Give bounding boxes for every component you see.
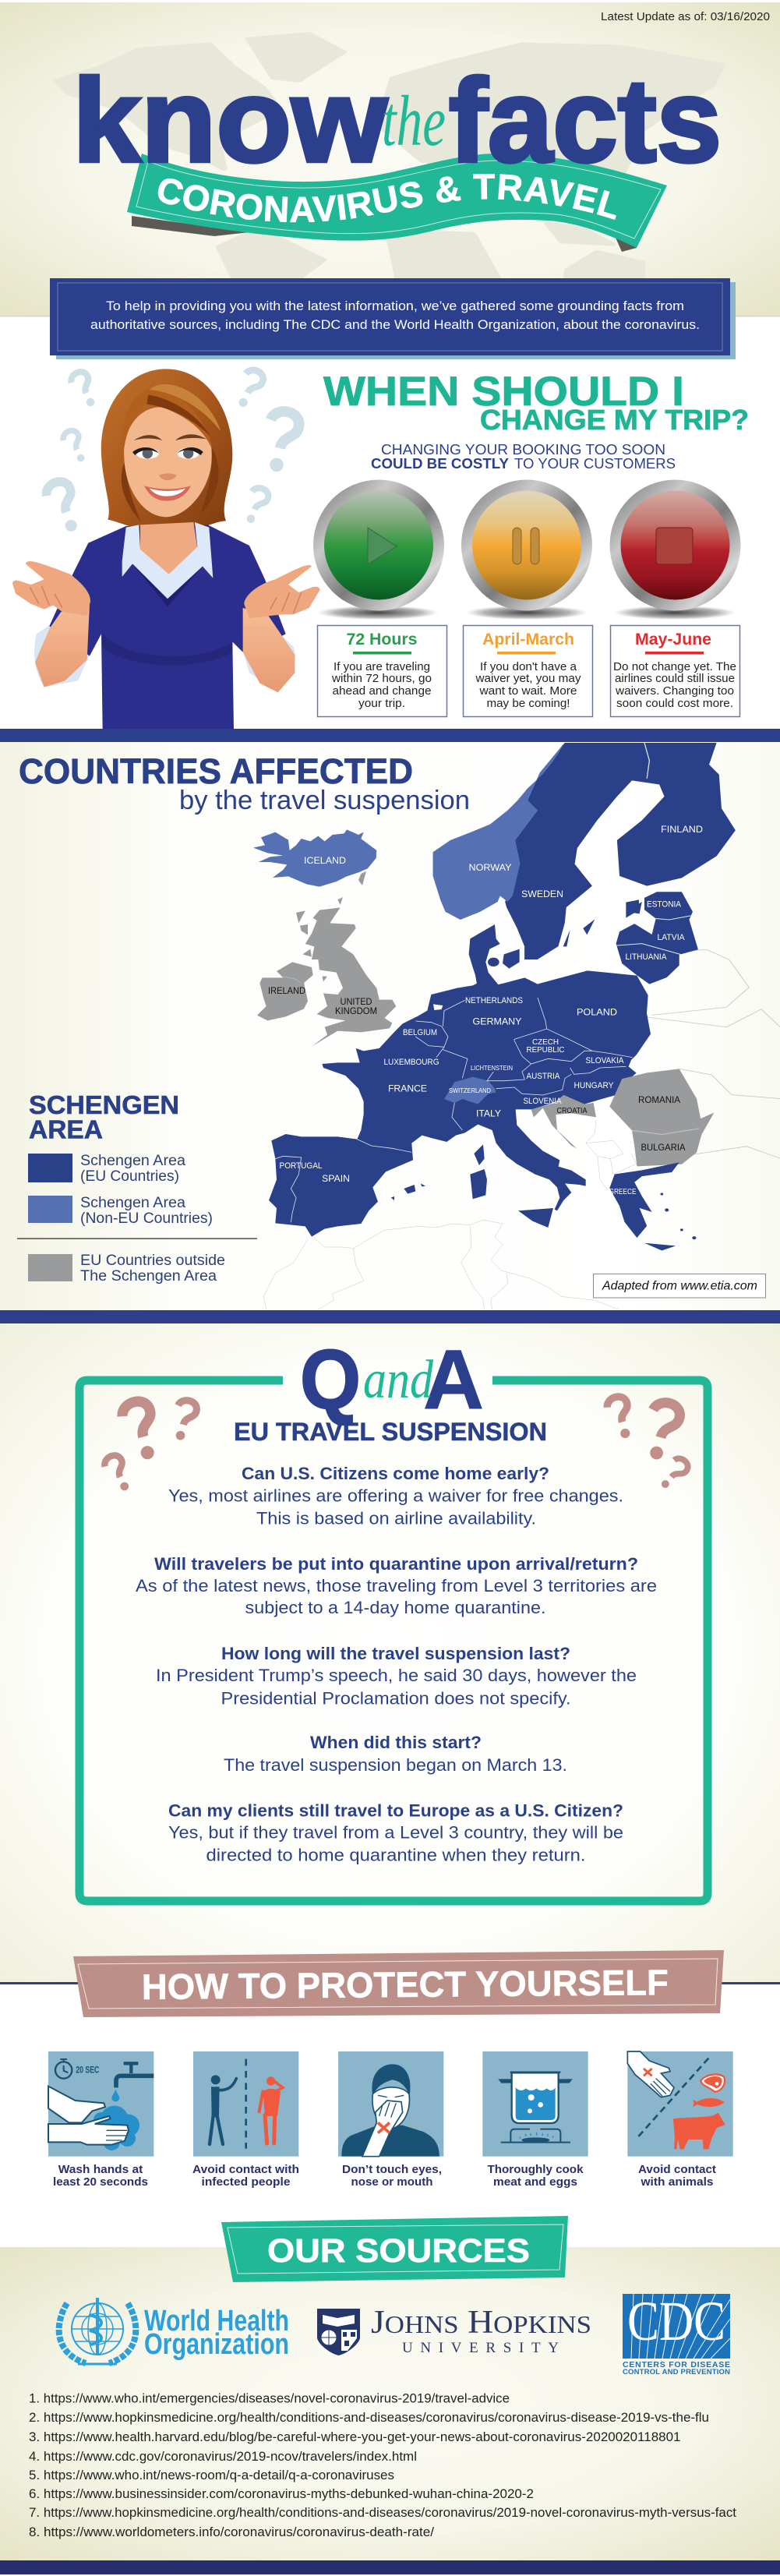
title: know bbox=[72, 55, 388, 187]
footer bar bbox=[0, 2560, 780, 2574]
captions: protection tips: infected people bbox=[201, 2176, 290, 2189]
logo: World Health Organization: World Health bbox=[144, 2305, 289, 2337]
legend: schengen area: The Schengen Area bbox=[80, 1268, 217, 1284]
legend: schengen area: (Non-EU Countries) bbox=[80, 1210, 213, 1227]
text: questions and answers: Presidential Proclamation does not specify. bbox=[221, 1688, 570, 1708]
card: 72 hours: ahead and change bbox=[332, 684, 432, 698]
map labels: ESTONIA bbox=[647, 899, 682, 909]
card: may-june: Do not change yet. The bbox=[613, 660, 736, 673]
intro box: To help in providing you with the latest information, we’ve gathered some grounding facts from bbox=[106, 299, 684, 313]
intro box: authoritative sources, including The CDC and the World Health Organization, about the coronavirus. bbox=[90, 317, 700, 332]
logo: World Health Organization: Organization bbox=[144, 2328, 289, 2361]
legend: schengen area: AREA bbox=[29, 1115, 103, 1144]
subheading: TO YOUR CUSTOMERS bbox=[514, 455, 676, 472]
title bbox=[72, 55, 722, 187]
icon: avoid animals bbox=[627, 2051, 733, 2157]
card: 72 hours: within 72 hours, go bbox=[331, 672, 432, 685]
captions: protection tips: Thoroughly cook bbox=[488, 2164, 584, 2176]
source links bbox=[29, 2391, 736, 2539]
source links: 1. https://www.who.int/emergencies/diseases/novel-coronavirus-2019/travel-advice bbox=[29, 2391, 510, 2405]
text: questions and answers: directed to home quarantine when they return. bbox=[206, 1846, 586, 1864]
legend: schengen area: EU Countries outside bbox=[80, 1253, 225, 1269]
map labels: ITALY bbox=[476, 1108, 501, 1119]
legend: schengen area bbox=[17, 1090, 257, 1284]
captions: protection tips: nose or mouth bbox=[351, 2176, 433, 2189]
card: may-june: soon could cost more. bbox=[616, 697, 733, 710]
text: questions and answers: Can U.S. Citizens come home early? bbox=[242, 1464, 549, 1483]
panel: how to protect yourself bbox=[0, 1950, 780, 2189]
map labels: CZECH bbox=[532, 1037, 559, 1047]
map labels: PORTUGAL bbox=[279, 1161, 323, 1171]
map: scandinavia, baltics and south-east bbox=[433, 743, 736, 1250]
heading: Q and A: and bbox=[363, 1350, 434, 1410]
panel: Q and A bbox=[0, 1323, 780, 1982]
heading: when should I change my trip bbox=[323, 369, 749, 436]
source links: 8. https://www.worldometers.info/coronavirus/coronavirus-death-rate/ bbox=[29, 2525, 434, 2539]
legend: schengen area: (EU Countries) bbox=[80, 1168, 179, 1185]
map labels: FINLAND bbox=[661, 824, 703, 835]
map labels: LUXEMBOURG bbox=[383, 1058, 439, 1067]
illustration: woman with question marks bbox=[12, 367, 320, 730]
card: 72 hours bbox=[318, 625, 447, 717]
map labels: FRANCE bbox=[388, 1083, 427, 1094]
map labels: REPUBLIC bbox=[527, 1045, 565, 1055]
captions: protection tips bbox=[53, 2164, 716, 2189]
map labels: POLAND bbox=[577, 1007, 617, 1018]
source links: 5. https://www.who.int/news-room/q-a-detail/q-a-coronaviruses bbox=[29, 2468, 394, 2482]
banner: how to protect yourself: HOW TO PROTECT YOURSELF bbox=[142, 1962, 669, 2007]
legend: schengen area: Schengen Area bbox=[80, 1195, 185, 1211]
text: questions and answers: How long will the travel suspension last? bbox=[221, 1644, 570, 1663]
logo: CDC: CENTERS FOR DISEASE bbox=[623, 2360, 730, 2369]
card: april-march: want to wait. More bbox=[478, 684, 577, 698]
map labels: non-schengen: ROMANIA bbox=[638, 1096, 680, 1105]
heading: Q and A: Q bbox=[300, 1332, 361, 1426]
text: questions and answers: Yes, most airlines are offering a waiver for free changes. bbox=[168, 1486, 623, 1506]
heading: countries affected: COUNTRIES AFFECTED bbox=[19, 751, 413, 791]
source links: 4. https://www.cdc.gov/coronavirus/2019-ncov/travelers/index.html bbox=[29, 2450, 417, 2464]
ribbon: CORONAVIRUS & TRAVEL bbox=[157, 174, 616, 223]
map labels: ICELAND bbox=[304, 855, 346, 866]
map labels: GREECE bbox=[609, 1188, 637, 1196]
map labels: AUSTRIA bbox=[527, 1072, 560, 1081]
card: april-march: April-March bbox=[482, 631, 574, 648]
map labels: non-schengen: IRELAND bbox=[268, 987, 305, 996]
legend: schengen area: Schengen Area bbox=[80, 1153, 185, 1169]
source links: 2. https://www.hopkinsmedicine.org/health/conditions-and-diseases/coronavirus/coronavirus-disease-2019-vs-the-flu bbox=[29, 2411, 709, 2425]
map: norway bbox=[433, 744, 564, 920]
intro box bbox=[50, 278, 736, 359]
ribbon bbox=[127, 154, 667, 252]
world map backdrop bbox=[57, 34, 722, 278]
captions: protection tips: Avoid contact bbox=[638, 2164, 716, 2176]
icon: avoid contact bbox=[193, 2051, 298, 2157]
map labels: GERMANY bbox=[472, 1016, 522, 1027]
map labels: LICHTENSTEIN bbox=[471, 1064, 513, 1072]
card: may-june: May-June bbox=[635, 631, 711, 648]
panel: countries affected bbox=[0, 729, 780, 1323]
button: red stop bbox=[609, 480, 740, 620]
heading: when should I change my trip: WHEN SHOULD I bbox=[323, 369, 684, 415]
card: april-march: If you don't have a bbox=[480, 660, 577, 673]
card: april-march: may be coming! bbox=[486, 697, 570, 710]
logo: Johns Hopkins University bbox=[317, 2305, 591, 2356]
map: surrounding countries bbox=[263, 949, 780, 1309]
title: facts bbox=[449, 55, 722, 187]
heading: when should I change my trip: CHANGE MY TRIP? bbox=[480, 404, 749, 436]
icon: cook thoroughly bbox=[482, 2051, 588, 2157]
icon: wash hands: 20 SEC bbox=[76, 2064, 100, 2075]
map credit bbox=[594, 1274, 765, 1298]
source links: 6. https://www.businessinsider.com/coronavirus-myths-debunked-wuhan-china-2020-2 bbox=[29, 2487, 534, 2501]
card: may-june: airlines could still issue bbox=[615, 672, 735, 685]
source links: 7. https://www.hopkinsmedicine.org/health/conditions-and-diseases/coronavirus/2019-novel-coronavirus-myth-versus-fact bbox=[29, 2506, 736, 2520]
card: 72 hours: your trip. bbox=[358, 697, 405, 710]
panel: when should I change my trip bbox=[12, 367, 749, 730]
map labels: NETHERLANDS bbox=[465, 996, 523, 1005]
map labels: SLOVENIA bbox=[524, 1097, 562, 1106]
logo: CDC: CONTROL AND PREVENTION bbox=[623, 2368, 730, 2376]
text: questions and answers: When did this start? bbox=[310, 1733, 482, 1752]
card: april-march bbox=[463, 625, 592, 717]
map labels: non-schengen: KINGDOM bbox=[335, 1007, 377, 1016]
map labels: SWEDEN bbox=[521, 889, 563, 899]
map labels: non-schengen: UNITED bbox=[340, 998, 372, 1007]
subheading: CHANGING YOUR BOOKING TOO SOON bbox=[381, 441, 665, 458]
map: croatia bbox=[531, 1095, 596, 1148]
map: north-west Europe bbox=[253, 829, 639, 1047]
title word: the: the bbox=[382, 81, 446, 161]
card: may-june bbox=[611, 625, 740, 717]
map labels: non-schengen: BULGARIA bbox=[641, 1143, 686, 1153]
update date: Latest Update as of: 03/16/2020 bbox=[601, 10, 770, 23]
heading: Q and A: A bbox=[423, 1332, 484, 1426]
button: green play bbox=[313, 480, 444, 620]
captions: protection tips: least 20 seconds bbox=[53, 2176, 148, 2189]
logo: World Health Organization bbox=[59, 2298, 289, 2364]
banner: our sources bbox=[221, 2216, 568, 2282]
card: 72 hours: If you are traveling bbox=[334, 660, 430, 673]
panel: header bbox=[0, 2, 780, 359]
text: questions and answers: Yes, but if they travel from a Level 3 country, they will be bbox=[168, 1822, 623, 1843]
text: questions and answers: Can my clients still travel to Europe as a U.S. Citizen? bbox=[168, 1800, 623, 1821]
logo: CDC bbox=[623, 2290, 730, 2376]
icons: pink question marks bbox=[102, 1394, 690, 1494]
panel: our sources bbox=[0, 2216, 780, 2574]
subheading: by the travel suspension: by the travel suspension bbox=[179, 786, 470, 815]
text: questions and answers: As of the latest news, those traveling from Level 3 territories are bbox=[136, 1576, 657, 1595]
card: 72 hours: 72 Hours bbox=[346, 631, 418, 648]
text: questions and answers: Will travelers be put into quarantine upon arrival/return? bbox=[154, 1554, 638, 1574]
subheading bbox=[371, 441, 676, 472]
banner: how to protect yourself bbox=[73, 1950, 724, 2017]
map labels: LITHUANIA bbox=[625, 952, 667, 962]
text: questions and answers: This is based on airline availability. bbox=[256, 1509, 536, 1528]
card: april-march: waiver yet, you may bbox=[475, 672, 581, 685]
map labels: LATVIA bbox=[658, 933, 685, 942]
logo: Johns Hopkins University: JOHNS HOPKINS bbox=[371, 2305, 591, 2341]
map: switzerland bbox=[444, 1077, 496, 1104]
map labels: non-schengen: CROATIA bbox=[556, 1107, 588, 1115]
map labels: SWITZERLAND bbox=[449, 1087, 491, 1094]
heading: Q and A bbox=[300, 1332, 484, 1426]
map credit: Adapted from www.etia.com bbox=[602, 1280, 757, 1292]
logo: Johns Hopkins University: UNIVERSITY bbox=[402, 2340, 559, 2356]
text: questions and answers: The travel suspension began on March 13. bbox=[224, 1755, 567, 1775]
map labels: NORWAY bbox=[469, 862, 511, 873]
source links: 3. https://www.health.harvard.edu/blog/be-careful-where-you-get-your-news-about-coronavirus-2020020118801 bbox=[29, 2430, 681, 2444]
map labels: BELGIUM bbox=[403, 1028, 437, 1037]
map: south and central Europe bbox=[269, 970, 651, 1237]
logo: CDC: CDC bbox=[627, 2290, 725, 2352]
captions: protection tips: Wash hands at bbox=[58, 2164, 143, 2176]
map labels: SLOVAKIA bbox=[586, 1056, 624, 1065]
banner: our sources: OUR SOURCES bbox=[267, 2232, 530, 2270]
map labels bbox=[279, 824, 703, 1196]
captions: protection tips: Avoid contact with bbox=[192, 2164, 299, 2176]
heading: EU travel suspension: EU TRAVEL SUSPENSION bbox=[234, 1418, 547, 1446]
map labels: SPAIN bbox=[322, 1173, 350, 1184]
map labels: non-schengen bbox=[268, 987, 686, 1153]
icon: wash hands bbox=[48, 2051, 154, 2157]
captions: protection tips: with animals bbox=[640, 2176, 714, 2189]
captions: protection tips: meat and eggs bbox=[493, 2176, 577, 2189]
legend: schengen area: SCHENGEN bbox=[29, 1090, 179, 1119]
frame bbox=[79, 1380, 708, 1901]
icon: do not touch face bbox=[338, 2051, 443, 2157]
button: orange pause bbox=[461, 480, 592, 620]
text: questions and answers: In President Trump’s speech, he said 30 days, however the bbox=[156, 1666, 637, 1685]
card: may-june: waivers. Changing too bbox=[615, 684, 734, 698]
text: questions and answers: subject to a 14-day home quarantine. bbox=[245, 1598, 545, 1617]
text: questions and answers bbox=[136, 1464, 657, 1864]
subheading: COULD BE COSTLY bbox=[371, 455, 510, 472]
map labels: HUNGARY bbox=[574, 1081, 614, 1090]
captions: protection tips: Don’t touch eyes, bbox=[342, 2164, 442, 2176]
